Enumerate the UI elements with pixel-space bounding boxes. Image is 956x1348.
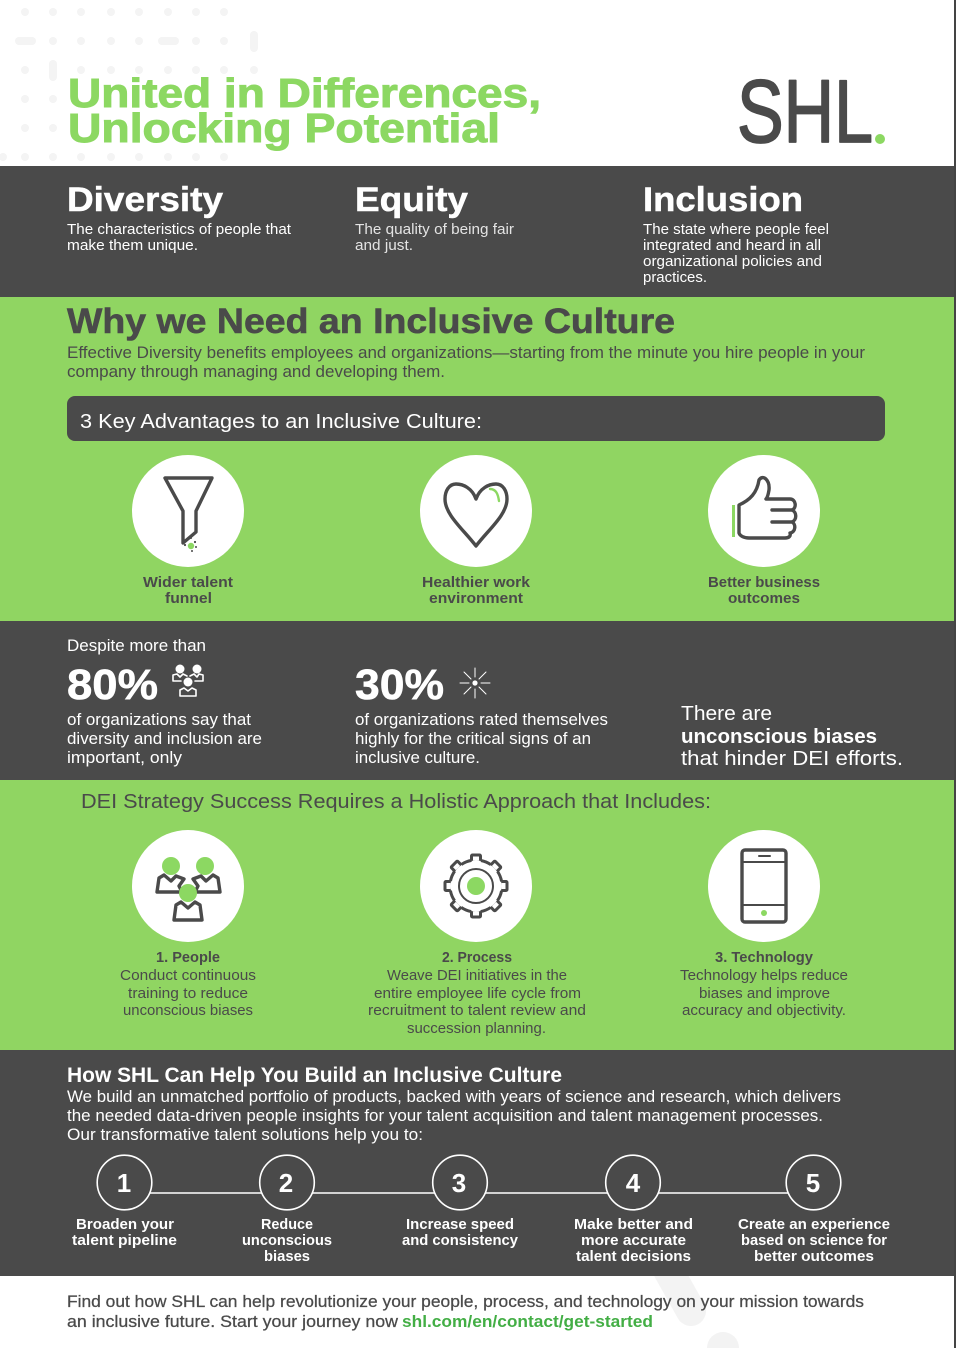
steps timeline xyxy=(72,1155,890,1265)
footer call to action: Find out how SHL can help revolutionize your people, process, and technology on your mission towards xyxy=(67,1293,864,1311)
icon: three people xyxy=(157,857,220,920)
pillar: people xyxy=(120,830,256,1019)
heading: DEI Strategy Success Requires a Holistic Approach that Includes: xyxy=(81,790,711,813)
SHL logo: SHL xyxy=(737,61,873,161)
step 5: based on science for xyxy=(741,1232,887,1249)
body text: the needed data-driven people insights for your talent acquisition and talent management processes. xyxy=(67,1107,823,1125)
icon: funnel xyxy=(165,478,212,552)
stat 30% description: inclusive culture. xyxy=(355,749,480,767)
intro text xyxy=(67,344,866,381)
definition: inclusion: organizational policies and xyxy=(643,253,822,270)
label xyxy=(422,574,531,607)
label: funnel xyxy=(165,590,212,607)
step 3 xyxy=(402,1155,519,1249)
icon: phone xyxy=(742,850,786,922)
description: accuracy and objectivity. xyxy=(682,1002,846,1019)
step 4 xyxy=(574,1155,693,1265)
step 3: Increase speed xyxy=(406,1216,514,1233)
step 2: 2 xyxy=(279,1168,293,1198)
step 2 xyxy=(242,1155,332,1265)
callout: unconscious biases xyxy=(681,702,903,770)
step 2: biases xyxy=(264,1248,310,1265)
description: biases and improve xyxy=(699,985,830,1002)
title: United in Differences, xyxy=(68,70,541,116)
step 1 xyxy=(72,1155,177,1249)
icon: spark xyxy=(460,668,490,698)
step 5 xyxy=(738,1155,890,1265)
body text: We build an unmatched portfolio of products, backed with years of science and research, which delivers xyxy=(67,1088,841,1106)
label xyxy=(708,574,820,607)
step 3: and consistency xyxy=(402,1232,519,1249)
advantages banner: 3 Key Advantages to an Inclusive Culture: xyxy=(80,411,482,433)
description: Weave DEI initiatives in the xyxy=(387,967,567,984)
lead-in text: Despite more than xyxy=(67,637,206,655)
label: Wider talent xyxy=(143,574,233,591)
label: environment xyxy=(429,590,523,607)
stat 30% description xyxy=(355,711,608,767)
stat 30% description: of organizations rated themselves xyxy=(355,711,608,729)
description: unconscious biases xyxy=(123,1002,253,1019)
stat 80% description: diversity and inclusion are xyxy=(67,730,262,748)
panel: DEI strategy xyxy=(0,780,954,1050)
callout: unconscious biases: that hinder DEI efforts. xyxy=(681,747,903,770)
pillar: technology xyxy=(680,830,848,1019)
stat: 80%: 80% xyxy=(67,661,158,709)
icon: people xyxy=(173,664,203,696)
definition: equity: and just. xyxy=(355,237,413,254)
definition: diversity: Diversity xyxy=(67,181,223,219)
body text xyxy=(67,1088,841,1144)
label xyxy=(143,574,233,607)
step 1: talent pipeline xyxy=(72,1232,177,1249)
body text: Our transformative talent solutions help you to: xyxy=(67,1126,423,1144)
step 4: 4 xyxy=(626,1168,641,1198)
description: Technology helps reduce xyxy=(680,967,848,984)
description: 2. Process xyxy=(442,949,512,966)
icon: thumbs up xyxy=(732,478,796,538)
label: Healthier work xyxy=(422,574,531,591)
stat 80% description xyxy=(67,711,262,767)
definition: inclusion: integrated and heard in all xyxy=(643,237,821,254)
description: succession planning. xyxy=(407,1020,546,1037)
definition: diversity xyxy=(67,181,292,254)
description: Conduct continuous xyxy=(120,967,256,984)
definition: diversity: make them unique. xyxy=(67,237,198,254)
panel: how SHL can help xyxy=(0,1050,954,1276)
callout: unconscious biases: There are xyxy=(681,702,772,725)
intro text: company through managing and developing them. xyxy=(67,363,445,381)
heading: How SHL Can Help You Build an Inclusive Culture xyxy=(67,1063,562,1087)
step 5: 5 xyxy=(806,1168,820,1198)
description xyxy=(368,949,586,1037)
advantage: healthier work environment xyxy=(420,455,532,607)
step 1: Broaden your xyxy=(76,1216,174,1233)
step 4: Make better and xyxy=(574,1216,693,1233)
advantage: better business outcomes xyxy=(708,455,820,607)
description: 3. Technology xyxy=(715,949,814,966)
definition: diversity: The characteristics of people that xyxy=(67,221,292,238)
callout: unconscious biases: unconscious biases xyxy=(681,725,877,748)
definition: inclusion: The state where people feel xyxy=(643,221,829,238)
panel: why we need an inclusive culture xyxy=(0,297,954,621)
footer call to action xyxy=(67,1293,864,1331)
stat 30% description: highly for the critical signs of an xyxy=(355,730,591,748)
pillar: process xyxy=(368,830,586,1037)
step 4: talent decisions xyxy=(576,1248,691,1265)
definition: equity: Equity xyxy=(355,181,468,219)
stat 80% description: important, only xyxy=(67,749,183,767)
heading: Why we Need an Inclusive Culture xyxy=(67,302,675,341)
advantages banner xyxy=(67,396,885,441)
step 4: more accurate xyxy=(581,1232,686,1249)
step 5: Create an experience xyxy=(738,1216,890,1233)
icon: gear xyxy=(445,855,507,917)
panel: statistics xyxy=(0,621,954,780)
label: Better business xyxy=(708,574,820,591)
definition: inclusion: practices. xyxy=(643,269,707,286)
footer call to action: an inclusive future. Start your journey now xyxy=(67,1313,398,1331)
stat: 30%: 30% xyxy=(355,661,444,709)
title xyxy=(68,70,541,151)
intro text: Effective Diversity benefits employees and organizations—starting from the minute you hire people in your xyxy=(67,344,866,362)
panel: definitions xyxy=(0,166,954,297)
stat 80% description: of organizations say that xyxy=(67,711,251,729)
icon: heart xyxy=(445,484,507,546)
step 1: 1 xyxy=(117,1168,131,1198)
label: outcomes xyxy=(728,590,800,607)
step 5: better outcomes xyxy=(754,1248,874,1265)
advantage: wider talent funnel xyxy=(132,455,244,607)
footer call to action: shl.com/en/contact/get-started xyxy=(402,1313,653,1331)
description: 1. People xyxy=(156,949,220,966)
step 2: unconscious xyxy=(242,1232,332,1249)
definition: equity: The quality of being fair xyxy=(355,221,514,238)
definition: inclusion xyxy=(643,181,829,286)
definition: equity xyxy=(355,181,514,254)
title: Unlocking Potential xyxy=(68,105,500,151)
description xyxy=(680,949,848,1019)
description: recruitment to talent review and xyxy=(368,1002,586,1019)
definition: inclusion: Inclusion xyxy=(643,181,803,219)
step 3: 3 xyxy=(452,1168,466,1198)
step 2: Reduce xyxy=(261,1216,313,1233)
description: training to reduce xyxy=(128,985,248,1002)
description: entire employee life cycle from xyxy=(374,985,581,1002)
description xyxy=(120,949,256,1019)
